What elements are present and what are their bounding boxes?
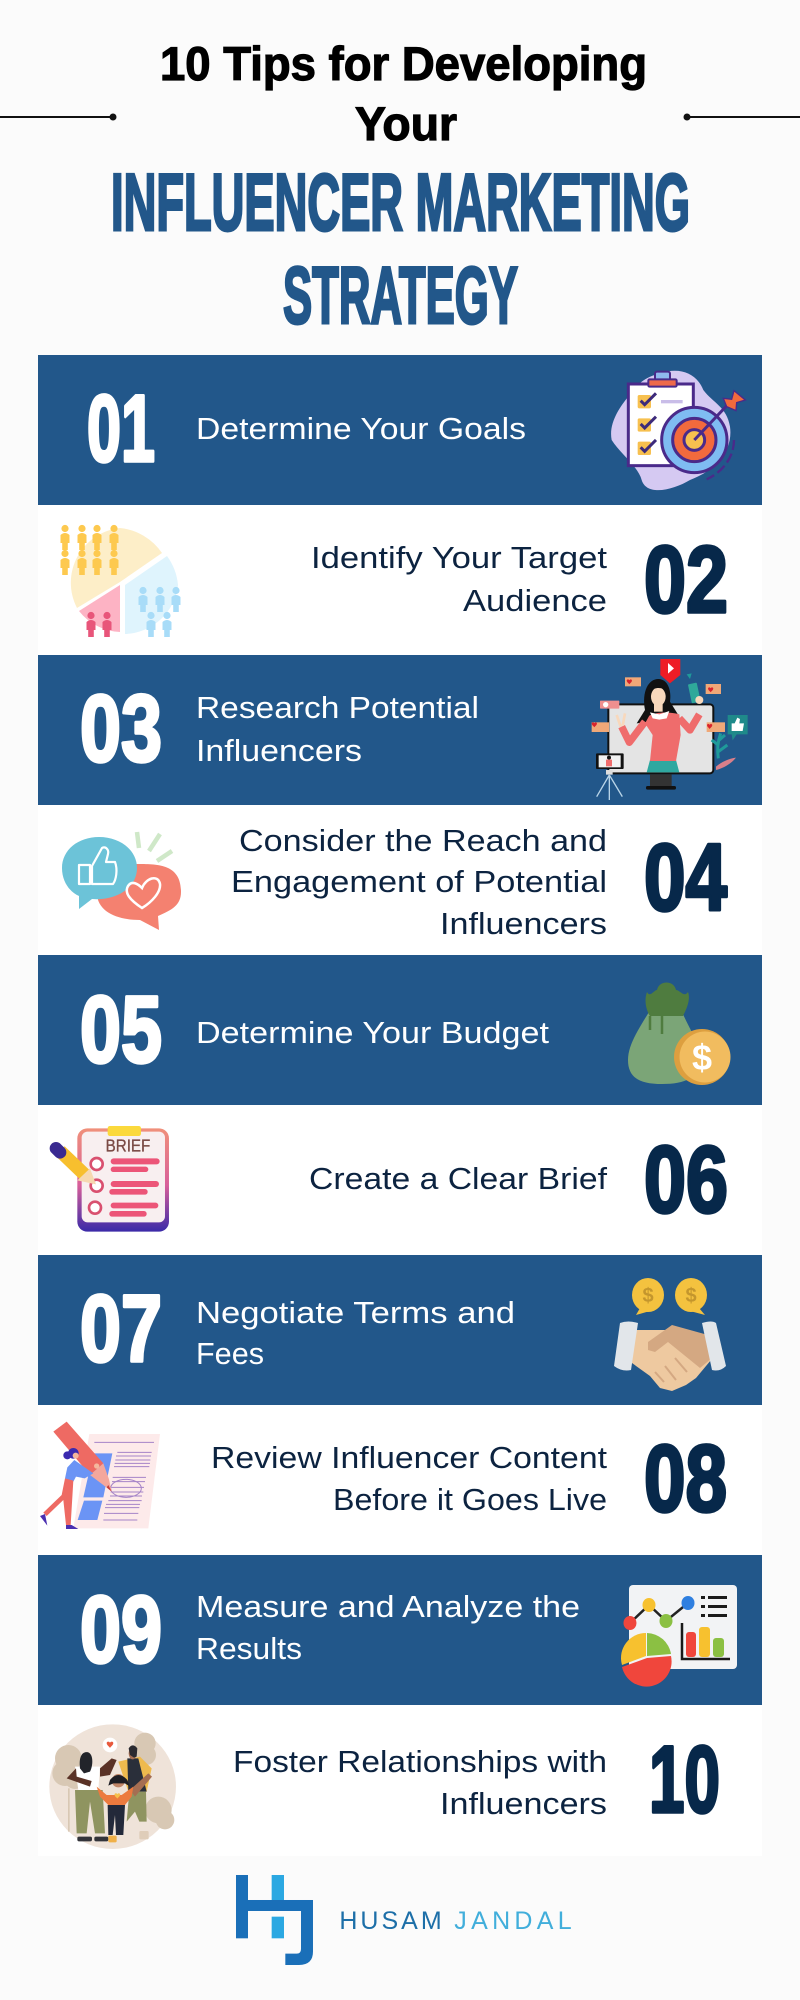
number 09: 09	[80, 1577, 162, 1683]
left connector line	[0, 114, 116, 120]
icon: brief clipboard and pencil: BRIEF	[106, 1136, 150, 1156]
panel: tip 02	[38, 505, 762, 655]
icon: family illustration	[49, 1724, 176, 1849]
text: Create a Clear Brief: Create a Clear Brief	[309, 1161, 607, 1196]
text: Foster Relationships with Influencers	[233, 1744, 607, 1821]
text: Determine Your Budget: Determine Your Budget	[196, 1015, 549, 1050]
icon: analytics dashboard	[621, 1585, 737, 1687]
icon: audience pie chart	[60, 525, 180, 637]
text: Consider the Reach and Engagement of Potential Influencers: Engagement of Potential	[231, 864, 607, 899]
panel: tip 05	[38, 955, 762, 1105]
icon: money bag and coin: $	[692, 1037, 712, 1078]
number 07: 07	[80, 1276, 162, 1382]
text: Foster Relationships with Influencers: Foster Relationships with	[233, 1744, 607, 1779]
logo text: HUSAM JANDAL: HUSAM	[339, 1907, 442, 1935]
text: Review Influencer Content Before it Goes Live: Review Influencer Content	[211, 1440, 607, 1475]
icon: person editing document	[40, 1422, 160, 1529]
panel: tip 06	[38, 1105, 762, 1255]
logo text: HUSAM JANDAL: JANDAL	[454, 1907, 572, 1935]
heading: 10 Tips for Developing Your: 10 Tips for Developing	[160, 37, 647, 90]
icon: money bag and coin	[628, 982, 730, 1085]
text: Research Potential Influencers	[196, 690, 479, 768]
panel: tip 09	[38, 1555, 762, 1705]
logo text: HUSAM JANDAL	[339, 1907, 572, 1935]
icon: brief clipboard and pencil	[56, 1126, 169, 1232]
right connector line	[684, 114, 800, 120]
panel: tip 04	[38, 805, 762, 955]
logo: Husam Jandal	[236, 1875, 572, 1965]
logo mark: HJ	[236, 1875, 313, 1965]
panel: tip 10	[38, 1705, 762, 1856]
panel: tip 03	[38, 655, 762, 805]
panel: tip 07	[38, 1255, 762, 1405]
text: Measure and Analyze the Results: Measure and Analyze the	[196, 1589, 580, 1624]
text: Measure and Analyze the Results	[196, 1589, 580, 1666]
panel: tip 08	[38, 1405, 762, 1555]
text: Negotiate Terms and Fees	[196, 1295, 515, 1371]
heading: Influencer Marketing Strategy	[111, 158, 690, 341]
number 04: 04	[644, 825, 727, 931]
number 10: 10	[649, 1727, 720, 1833]
text: Consider the Reach and Engagement of Potential Influencers	[231, 823, 607, 941]
heading: Influencer Marketing Strategy: STRATEGY	[283, 251, 518, 341]
text: Measure and Analyze the Results: Results	[196, 1631, 302, 1666]
number 01: 01	[87, 376, 155, 482]
icon: influencer at screen	[592, 659, 748, 800]
icon: like and love bubbles	[62, 832, 181, 930]
icon: handshake with coin bubbles: $	[685, 1285, 697, 1307]
number 08: 08	[644, 1426, 727, 1532]
icon: handshake with coin bubbles	[614, 1278, 726, 1391]
text: Foster Relationships with Influencers: Influencers	[440, 1786, 607, 1821]
heading: 10 Tips for Developing Your	[160, 37, 647, 150]
text: Negotiate Terms and Fees: Fees	[196, 1336, 264, 1371]
text: Consider the Reach and Engagement of Potential Influencers: Consider the Reach and	[239, 823, 607, 858]
title block	[0, 37, 800, 341]
text: Identify Your Target Audience: Identify Your Target	[311, 540, 607, 575]
number 05: 05	[80, 977, 162, 1083]
text: Negotiate Terms and Fees: Negotiate Terms and	[196, 1295, 515, 1330]
icon: handshake with coin bubbles: $	[642, 1285, 654, 1307]
text: Research Potential Influencers: Research Potential	[196, 690, 479, 725]
heading: 10 Tips for Developing Your: Your	[355, 97, 457, 150]
text: Identify Your Target Audience	[311, 540, 607, 618]
number 03: 03	[80, 676, 162, 782]
text: Review Influencer Content Before it Goes Live: Before it Goes Live	[333, 1482, 607, 1517]
icon: target and checklist	[611, 371, 745, 490]
text: Consider the Reach and Engagement of Potential Influencers: Influencers	[440, 906, 607, 941]
text: Determine Your Goals: Determine Your Goals	[196, 411, 526, 446]
text: Research Potential Influencers: Influencers	[196, 733, 362, 768]
panel: tip 01	[38, 355, 762, 505]
number 02: 02	[644, 527, 728, 633]
text: Identify Your Target Audience: Audience	[463, 583, 607, 618]
number 06: 06	[644, 1127, 728, 1233]
text: Review Influencer Content Before it Goes Live	[211, 1440, 607, 1517]
